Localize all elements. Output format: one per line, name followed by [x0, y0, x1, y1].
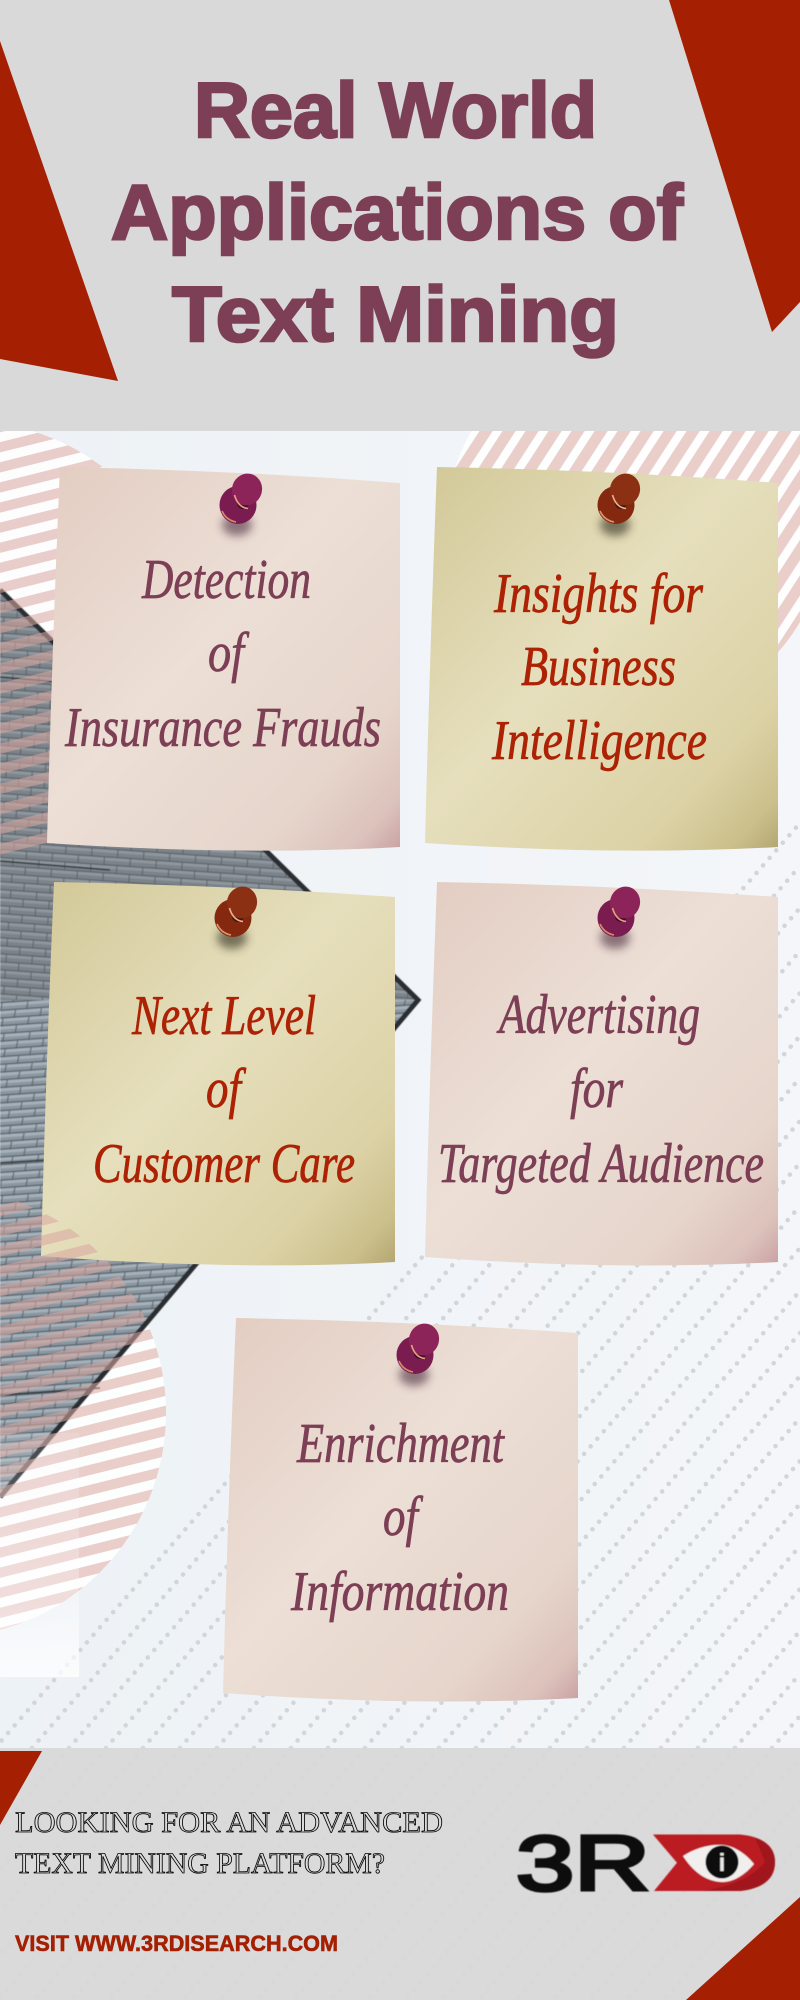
note text: of	[383, 1486, 424, 1548]
sticky note: Insights for Business Intelligence	[425, 467, 778, 851]
sticky note: Detection of Insurance Frauds	[47, 467, 400, 851]
sticky note: Enrichment of Information	[223, 1318, 578, 1702]
striped circle bottom-left	[0, 1188, 166, 1638]
note text: for	[570, 1058, 623, 1120]
note text	[438, 984, 764, 1195]
note text	[64, 560, 380, 747]
note text: of	[208, 622, 250, 684]
striped circle top-right	[456, 431, 800, 652]
main background panel	[0, 336, 800, 1748]
title	[111, 66, 684, 358]
note text: Advertising	[496, 984, 700, 1046]
call to action text	[15, 1806, 443, 1880]
roof photo	[0, 590, 418, 1497]
note text: Insights for	[493, 563, 703, 625]
note text: Detection	[141, 549, 311, 611]
logo: 3RDi	[516, 1819, 775, 1907]
title: Text Mining	[172, 270, 619, 358]
note text: Customer Care	[93, 1133, 355, 1195]
sticky note: Next Level of Customer Care	[41, 882, 395, 1265]
title: Applications of	[111, 168, 684, 256]
pin	[220, 470, 266, 536]
logo: 3RDi: i	[719, 1849, 725, 1877]
website link text: VISIT WWW.3RDISEARCH.COM	[15, 1931, 338, 1956]
call to action text: TEXT MINING PLATFORM?	[15, 1847, 385, 1880]
logo: 3RDi: 3R	[516, 1819, 650, 1907]
note text: Enrichment	[296, 1413, 505, 1475]
red shape: footer top-left	[0, 1751, 42, 1825]
footer panel	[0, 1748, 800, 2000]
title: Real World	[194, 66, 597, 154]
pin	[214, 883, 261, 949]
note text	[491, 563, 707, 772]
header panel	[0, 0, 800, 431]
note text: Next Level	[131, 985, 316, 1047]
pin	[598, 883, 644, 949]
note text: of	[206, 1058, 247, 1120]
note text	[95, 994, 354, 1183]
note text: Information	[290, 1561, 509, 1623]
red shape: footer bottom-right	[686, 1897, 800, 2000]
pin	[598, 470, 644, 536]
note text	[290, 1413, 509, 1623]
pin	[396, 1320, 443, 1386]
note text: Business	[521, 636, 676, 698]
note text: Insurance Frauds	[64, 697, 381, 759]
red shape: header right	[669, 0, 800, 332]
sticky note: Advertising for Targeted Audience	[425, 882, 778, 1266]
red shape: header left	[0, 41, 118, 381]
striped circle top-left	[0, 431, 102, 854]
call to action text: LOOKING FOR AN ADVANCED	[15, 1806, 443, 1839]
note text: Intelligence	[491, 710, 707, 772]
